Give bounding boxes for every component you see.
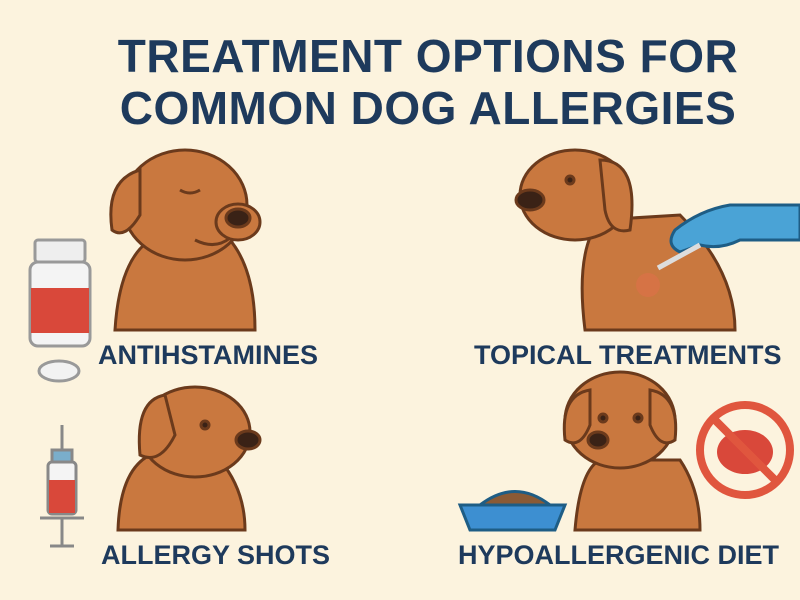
icon: syringe bbox=[40, 425, 84, 546]
label: diet: HYPOALLERGENIC DIET bbox=[458, 540, 779, 570]
dog: antihistamines bbox=[111, 150, 260, 330]
dog: diet bbox=[564, 372, 700, 530]
label: allergy shots: ALLERGY SHOTS bbox=[101, 540, 330, 570]
title: COMMON DOG ALLERGIES bbox=[120, 82, 736, 134]
icon: gloved hand bbox=[658, 205, 800, 268]
dog: topical bbox=[516, 150, 735, 330]
title bbox=[118, 30, 738, 134]
title: TREATMENT OPTIONS FOR bbox=[118, 30, 738, 82]
icon: no meat bbox=[700, 405, 790, 495]
label: topical: TOPICAL TREATMENTS bbox=[474, 340, 782, 370]
label: antihistamines: ANTIHSTAMINES bbox=[98, 340, 318, 370]
icon: medicine bottle bbox=[30, 240, 90, 381]
dog: allergy shots bbox=[118, 387, 260, 530]
icon: food bowl bbox=[460, 492, 565, 530]
